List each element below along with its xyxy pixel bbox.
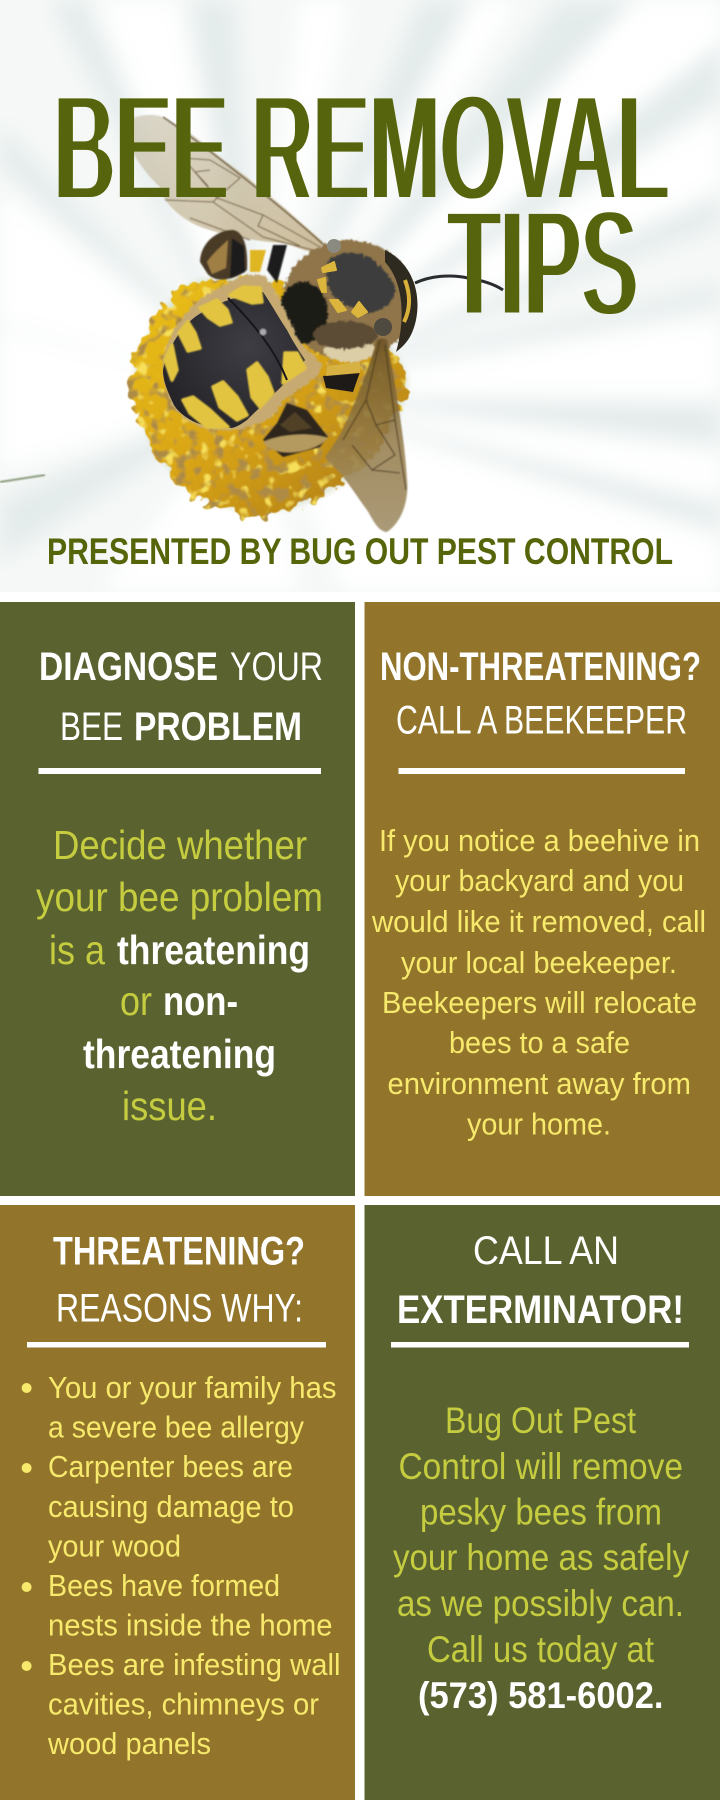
- insect wing, upper left: [131, 115, 325, 252]
- panel: threatening reasons: [0, 1205, 355, 1800]
- body text: decide threatening or not: is a: [49, 927, 105, 973]
- body text: bug out pest control: your home as safely: [393, 1537, 689, 1578]
- bullet 4: Bees are infesting wall: [48, 1647, 340, 1682]
- heading: diagnose your bee problem: BEE: [60, 705, 123, 749]
- hero photo: bee on white daisy: [0, 0, 720, 592]
- panel: non-threatening: [364, 602, 720, 1196]
- heading: diagnose your bee problem: [39, 645, 323, 749]
- bullet 2: causing damage to: [48, 1489, 294, 1524]
- body text: call your beekeeper: environment away from: [388, 1066, 691, 1101]
- heading: threatening reasons why: REASONS WHY:: [56, 1286, 303, 1330]
- middle leg: [263, 403, 328, 457]
- body text: call your beekeeper: your home.: [467, 1106, 611, 1142]
- body text: call your beekeeper: [371, 823, 706, 1142]
- heading: non-threatening call a beekeeper: [380, 645, 701, 742]
- body text: bug out pest control: pesky bees from: [420, 1492, 662, 1533]
- antenna: [415, 276, 503, 290]
- bullet 4: wood panels: [47, 1726, 211, 1761]
- bullet 3: nests inside the home: [48, 1608, 332, 1642]
- body text: call your beekeeper: If you notice a beehive in: [379, 823, 700, 858]
- panel: diagnose: [0, 602, 355, 1196]
- hind legs: [200, 230, 287, 283]
- body text: decide threatening or not: your bee problem: [36, 874, 323, 920]
- body text: call your beekeeper: would like it removed, call: [371, 904, 706, 939]
- body text: decide threatening or not: non-: [163, 978, 238, 1024]
- body text: bug out pest control: Call us today at: [427, 1629, 655, 1670]
- bullet 1: You or your family has: [48, 1370, 336, 1405]
- body text: bug out pest control: as we possibly can.: [397, 1583, 684, 1624]
- body text: bug out pest control: Control will remove: [398, 1446, 683, 1487]
- body text: bug out pest control: (573) 581-6002.: [418, 1675, 664, 1716]
- body text: bug out pest control: Bug Out Pest: [445, 1400, 637, 1441]
- body text: decide threatening or not: threatening: [117, 927, 310, 973]
- flower centre: [132, 276, 408, 516]
- bullet 2: Carpenter bees are: [48, 1449, 293, 1484]
- title: [54, 61, 669, 350]
- body text: decide threatening or not: issue.: [122, 1083, 217, 1129]
- insect wing, lower right: [325, 338, 407, 532]
- heading: threatening reasons why: THREATENING?: [53, 1230, 305, 1274]
- body text: decide threatening or not: [36, 822, 323, 1129]
- bullet 4: cavities, chimneys or: [48, 1686, 319, 1722]
- bullet 2: [22, 1449, 294, 1564]
- bullet 3: [22, 1568, 332, 1642]
- panel: call an exterminator: [364, 1205, 720, 1800]
- abdomen with yellow markings: [163, 274, 323, 431]
- bullet 1: a severe bee allergy: [48, 1410, 304, 1444]
- heading: diagnose your bee problem: PROBLEM: [134, 705, 302, 749]
- body text: call your beekeeper: bees to a safe: [449, 1025, 630, 1060]
- heading: call an exterminator: EXTERMINATOR!: [397, 1288, 684, 1332]
- body text: bug out pest control: [393, 1400, 689, 1716]
- heading: call an exterminator: [397, 1229, 684, 1332]
- bullet 2: your wood: [48, 1528, 181, 1564]
- bullet list of reasons: [22, 1370, 340, 1761]
- body text: decide threatening or not: threatening: [83, 1031, 276, 1077]
- heading: diagnose your bee problem: YOUR: [230, 645, 323, 689]
- bullet 3: Bees have formed: [48, 1568, 280, 1603]
- body text: call your beekeeper: Beekeepers will relocate: [382, 985, 697, 1020]
- body text: decide threatening or not: or: [120, 978, 152, 1024]
- petal background: [0, 0, 720, 592]
- heading: threatening reasons why: [53, 1230, 305, 1330]
- bullet 4: [22, 1647, 340, 1761]
- body text: call your beekeeper: your local beekeeper.: [401, 945, 677, 980]
- body text: decide threatening or not: Decide whether: [53, 822, 307, 868]
- thorax and head: [278, 239, 418, 392]
- bullet 1: [22, 1370, 336, 1444]
- body text: call your beekeeper: your backyard and you: [395, 863, 684, 898]
- heading: call an exterminator: CALL AN: [473, 1229, 619, 1273]
- heading: diagnose your bee problem: DIAGNOSE: [39, 645, 218, 689]
